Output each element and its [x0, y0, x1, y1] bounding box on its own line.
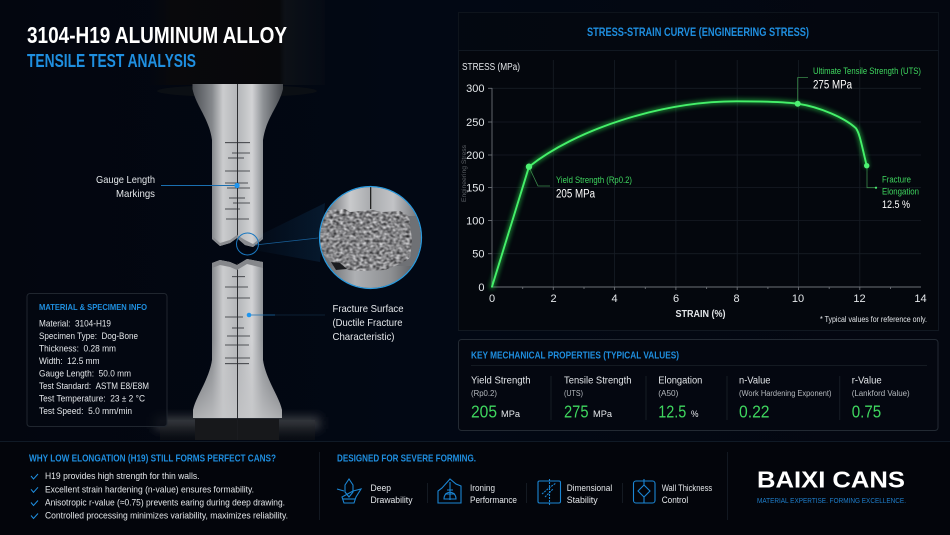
magnified fracture surface: [236, 186, 422, 290]
x tick labels: 8: [733, 293, 740, 305]
info lines: Test Standard: ASTM E8/E8M: [39, 381, 149, 391]
label: ironing performance: Performance: [470, 495, 517, 506]
properties heading: KEY MECHANICAL PROPERTIES (TYPICAL VALUES): [471, 350, 679, 361]
annotation: yield strength: Yield Strength (Rp0.2): [556, 175, 632, 185]
x tick labels: [489, 293, 927, 305]
specimen centre line: [236, 84, 238, 440]
property: r-value: 0.75: [852, 402, 881, 422]
label: deep drawability: [370, 483, 413, 506]
icon: wall thickness control: [634, 479, 655, 503]
property: n-value: (Work Hardening Exponent): [739, 389, 832, 398]
x tick labels: 14: [914, 293, 927, 305]
axes: [488, 88, 921, 290]
property: n-value: [739, 375, 832, 422]
fracture edges: [212, 235, 263, 247]
annotation: yield strength: 205 MPa: [556, 188, 596, 200]
label: dimensional stability: Stability: [567, 495, 598, 506]
icon: ironing performance: [438, 479, 461, 503]
callout: fracture surface: Fracture Surface: [332, 303, 404, 315]
label: deep drawability: Deep: [370, 483, 391, 494]
info lines: Material: 3104-H19: [39, 319, 111, 329]
grid: [492, 60, 921, 287]
title: 3104-H19 ALUMINUM ALLOY: [27, 22, 287, 48]
info lines: Width: 12.5 mm: [39, 356, 100, 366]
label: dimensional stability: Dimensional: [567, 483, 612, 494]
property: yield strength: Yield Strength: [471, 375, 530, 386]
annotation: fracture elongation: [864, 163, 919, 211]
property: tensile strength: (UTS): [564, 389, 583, 398]
label: ironing performance: Ironing: [470, 483, 495, 494]
property: tensile strength: Tensile Strength: [564, 375, 632, 386]
property: elongation: 12.5: [658, 402, 686, 422]
label: wall thickness control: Control: [662, 495, 688, 506]
annotation: yield strength: [526, 164, 632, 200]
y tick labels: 250: [466, 117, 484, 129]
property: tensile strength: [564, 375, 632, 422]
label: dimensional stability: [567, 483, 612, 506]
bullet list: H19 provides high strength for thin walls.: [45, 471, 200, 482]
property: elongation: %: [691, 409, 699, 420]
x axis title: STRAIN (%): [676, 308, 726, 320]
property: n-value: 0.22: [739, 402, 770, 422]
title: [27, 22, 287, 71]
logo: baixi cans: [757, 466, 906, 505]
info lines: [39, 319, 149, 416]
callout: fracture surface: (Ductile Fracture: [332, 317, 403, 329]
property: n-value: n-Value: [739, 375, 771, 386]
bullet list: Anisotropic r-value (≈0.75) prevents earing during deep drawing.: [45, 498, 285, 508]
property: elongation: (A50): [658, 389, 679, 398]
property: r-value: r-Value: [852, 375, 882, 386]
annotation: fracture elongation: Elongation: [882, 186, 919, 196]
bullet list: [45, 471, 288, 522]
info heading: MATERIAL & SPECIMEN INFO: [39, 302, 147, 312]
callout: gauge length markings: Gauge Length: [96, 174, 155, 186]
icon: dimensional stability: [538, 479, 560, 505]
panel: why low elongation: [29, 454, 288, 522]
property: yield strength: MPa: [501, 409, 521, 420]
bottom bar: [0, 441, 950, 535]
x tick labels: 6: [673, 293, 679, 305]
label: deep drawability: Drawability: [370, 495, 413, 506]
annotation: ultimate tensile strength: [795, 66, 921, 107]
y axis title: STRESS (MPa): [462, 62, 520, 73]
chart heading: STRESS-STRAIN CURVE (ENGINEERING STRESS): [587, 27, 809, 39]
logo: baixi cans: MATERIAL EXPERTISE. FORMING EXCELLENCE.: [757, 496, 906, 505]
y tick labels: 0: [478, 282, 484, 294]
panel: designed for severe forming: DESIGNED FOR SEVERE FORMING.: [337, 454, 476, 465]
panel: material and specimen info: [27, 294, 167, 426]
title: TENSILE TEST ANALYSIS: [27, 51, 196, 71]
panel: tensile specimen photograph: [150, 0, 325, 440]
property: tensile strength: MPa: [593, 409, 613, 420]
property: r-value: [852, 375, 910, 422]
property: elongation: Elongation: [658, 375, 702, 386]
property: yield strength: 205: [471, 402, 497, 422]
label: wall thickness control: [662, 483, 712, 506]
gauge tick marks lower: [225, 277, 250, 364]
y tick labels: 200: [466, 150, 484, 162]
label: ironing performance: [470, 483, 517, 506]
annotation: ultimate tensile strength: Ultimate Tensile Strength (UTS): [813, 66, 921, 76]
icon: deep drawability: [337, 479, 361, 503]
property: elongation: [658, 375, 702, 422]
panel: why low elongation: WHY LOW ELONGATION (H19) STILL FORMS PERFECT CANS?: [29, 454, 276, 465]
annotation: ultimate tensile strength: 275 MPa: [813, 80, 853, 92]
rotated axis note: Engineering Stress: [461, 144, 468, 202]
bullet list: Controlled processing minimizes variability, maximizes reliability.: [45, 510, 288, 522]
panel: key mechanical properties: [458, 340, 938, 430]
callout: fracture surface: Characteristic): [332, 331, 394, 343]
property: tensile strength: 275: [564, 402, 588, 422]
x tick labels: 2: [550, 293, 557, 305]
y tick labels: [466, 83, 484, 294]
y tick labels: 150: [466, 182, 484, 194]
x tick labels: 12: [853, 293, 866, 305]
callout: gauge length markings: Markings: [116, 188, 155, 200]
property: yield strength: (Rp0.2): [471, 389, 497, 398]
panel: stress-strain chart: [458, 12, 938, 330]
logo: baixi cans: BAIXI CANS: [757, 466, 905, 492]
footnote: * Typical values for reference only.: [820, 315, 927, 324]
info lines: Test Temperature: 23 ± 2 °C: [39, 394, 145, 404]
info lines: Test Speed: 5.0 mm/min: [39, 406, 132, 416]
x tick labels: 4: [611, 293, 618, 305]
panel: designed for severe forming: [337, 454, 712, 506]
annotation: fracture elongation: Fracture: [882, 175, 911, 185]
property: yield strength: [471, 375, 530, 422]
x tick labels: 10: [792, 293, 804, 305]
info lines: Specimen Type: Dog-Bone: [39, 331, 138, 341]
bullet list: Excellent strain hardening (n-value) ensures formability.: [45, 484, 254, 495]
info lines: Thickness: 0.28 mm: [39, 344, 116, 354]
y tick labels: 100: [466, 216, 484, 228]
gauge tick marks upper: [225, 143, 250, 219]
curve: [492, 101, 867, 287]
annotation: fracture elongation: 12.5 %: [882, 199, 910, 211]
check marks: [31, 474, 38, 518]
x tick labels: 0: [489, 293, 495, 305]
label: wall thickness control: Wall Thickness: [662, 483, 712, 494]
y tick labels: 300: [466, 83, 484, 95]
info lines: Gauge Length: 50.0 mm: [39, 369, 131, 379]
callout: gauge length markings: [96, 174, 240, 200]
callout: fracture surface: [247, 303, 404, 343]
y tick labels: 50: [472, 248, 484, 260]
property: r-value: (Lankford Value): [852, 389, 910, 398]
